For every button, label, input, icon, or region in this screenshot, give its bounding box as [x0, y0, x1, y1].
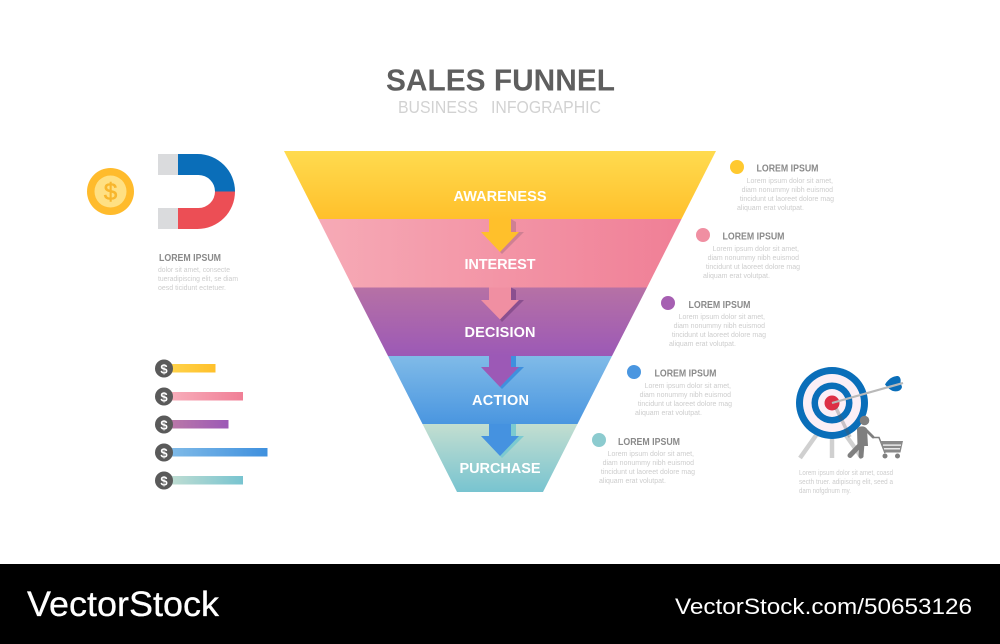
arrow: awareness to interest [481, 219, 519, 252]
arrow: action to purchase [481, 424, 519, 456]
bar 5: $ [160, 474, 168, 488]
callout: action: LOREM IPSUM [654, 368, 716, 380]
text block: magnet caption: oesd ticidunt ectetuer. [158, 285, 226, 292]
footer logo: VectorStock [27, 585, 220, 624]
callout: purchase: LOREM IPSUM [618, 437, 680, 448]
icon: magnet [158, 154, 235, 229]
callout: decision: tincidunt ut laoreet dolore mag [672, 332, 766, 339]
band: action [388, 356, 612, 424]
label: decision: DECISION [464, 325, 536, 341]
icon: target with arrow and shopper [796, 367, 903, 458]
bar chart [155, 360, 268, 490]
shopping cart [873, 438, 903, 458]
callout: awareness: tincidunt ut laoreet dolore mag [740, 196, 834, 203]
bar 4: $ [160, 446, 168, 460]
title [386, 62, 615, 117]
title: BUSINESS [398, 97, 478, 117]
callout: decision: aliquam erat volutpat. [669, 341, 736, 348]
callout: interest: LOREM IPSUM [722, 232, 784, 242]
bar 2: $ [160, 390, 168, 404]
callout: awareness [730, 160, 834, 212]
callout: interest [696, 228, 800, 280]
text block: magnet caption: tueradipiscing elit, se diam [158, 276, 238, 283]
callout: purchase: Lorem ipsum dolor sit amet, [608, 451, 694, 458]
callout: awareness: diam nonummy nibh euismod [742, 187, 833, 194]
callout: decision [661, 296, 766, 348]
footer bar [0, 564, 1000, 644]
bar 1: $ [160, 362, 168, 376]
callout: purchase: diam nonummy nibh euismod [603, 460, 694, 467]
band: interest [318, 219, 682, 288]
icon: dollar coin: $ [104, 179, 117, 206]
callout: action: Lorem ipsum dolor sit amet, [645, 383, 731, 390]
band: decision [353, 288, 647, 356]
arrow shadow: decision to action [500, 356, 524, 389]
callout: decision: LOREM IPSUM [688, 300, 750, 311]
callout: interest: Lorem ipsum dolor sit amet, [713, 246, 799, 253]
target rings [796, 367, 868, 439]
callout: decision: diam nonummy nibh euismod [674, 323, 765, 330]
callout: decision: Lorem ipsum dolor sit amet, [679, 314, 765, 321]
title: INFOGRAPHIC [491, 97, 601, 117]
callout: awareness: LOREM IPSUM [756, 164, 818, 174]
arrow: decision to action [481, 356, 519, 387]
shopper [850, 416, 873, 456]
bar 3: $ [160, 418, 168, 432]
callout: action: diam nonummy nibh euismod [640, 392, 731, 399]
arrow shadow: interest to decision [500, 288, 524, 322]
arrow shadow: action to purchase [500, 424, 524, 458]
text block: magnet caption: dolor sit amet, consecte [158, 267, 230, 274]
text block: target caption: secth truer. adipiscing elit, seed a [799, 479, 893, 486]
arrow: interest to decision [481, 288, 519, 320]
callout: interest: diam nonummy nibh euismod [708, 255, 799, 262]
title: SALES FUNNEL [386, 62, 615, 98]
callout: action [627, 365, 732, 417]
text block: magnet caption: LOREM IPSUM [159, 253, 221, 264]
arrow shadow: awareness to interest [500, 219, 524, 254]
label: purchase: PURCHASE [460, 461, 541, 477]
stand shadow on target [836, 408, 850, 437]
text block: target caption: Lorem ipsum dolor sit amet, coasd [799, 470, 893, 477]
icon: dollar coin [87, 168, 134, 215]
label: awareness: AWARENESS [454, 189, 547, 205]
callout: action: tincidunt ut laoreet dolore mag [638, 401, 732, 408]
label: action: ACTION [472, 393, 529, 409]
callout: action: aliquam erat volutpat. [635, 410, 702, 417]
dart [832, 376, 903, 403]
footer url: VectorStock.com/50653126 [675, 594, 972, 619]
label: interest: INTEREST [464, 257, 536, 273]
callout: interest: tincidunt ut laoreet dolore mag [706, 264, 800, 271]
callout: awareness: aliquam erat volutpat. [737, 205, 804, 212]
text block: target caption [799, 470, 893, 495]
callout: purchase: tincidunt ut laoreet dolore mag [601, 469, 695, 476]
callout: purchase [592, 433, 695, 485]
target stand [800, 434, 862, 458]
text block: target caption: dam nofgdnum my. [799, 488, 851, 495]
funnel [284, 151, 716, 492]
callout: purchase: aliquam erat volutpat. [599, 478, 666, 485]
text block: magnet caption [158, 253, 238, 292]
callout: awareness: Lorem ipsum dolor sit amet, [747, 178, 833, 185]
callout: interest: aliquam erat volutpat. [703, 273, 770, 280]
band: purchase [422, 424, 578, 492]
band: awareness [284, 151, 716, 219]
